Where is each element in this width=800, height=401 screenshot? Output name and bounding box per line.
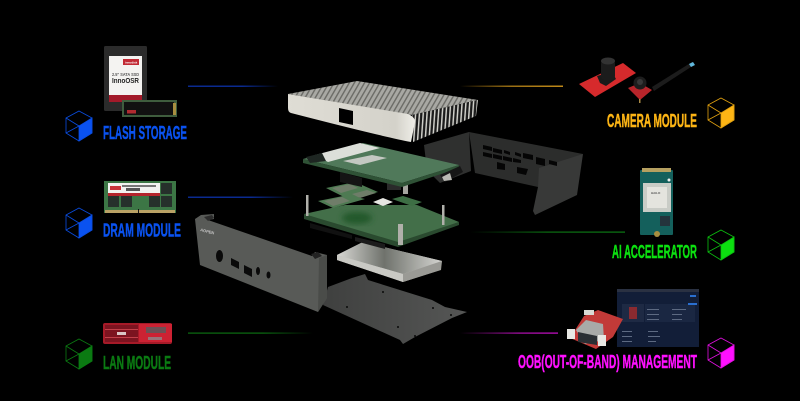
bottom plate xyxy=(323,274,467,344)
lower mainboard xyxy=(304,195,459,249)
label: LAN module: LAN MODULE xyxy=(103,353,171,373)
icon: SATA SSD and M.2 drive: 2.5" SATA SSD xyxy=(112,72,139,77)
front window xyxy=(339,108,353,125)
icon: OOB board with RJ45 port xyxy=(567,310,623,349)
icon: green cube xyxy=(708,230,734,260)
DRAM module group xyxy=(66,181,181,240)
connector line: OOB management xyxy=(460,332,558,334)
icon: blue cube xyxy=(66,111,92,141)
icon: yellow cube xyxy=(708,98,734,128)
icon: magenta cube xyxy=(708,338,734,368)
icon: SO-DIMM memory xyxy=(104,181,176,213)
fanless heatsink enclosure xyxy=(288,81,478,142)
rear bracket xyxy=(424,132,583,215)
connector line: flash storage xyxy=(188,86,278,87)
icon: SATA SSD and M.2 drive xyxy=(104,46,177,117)
icon: blue cube xyxy=(66,208,92,238)
label: AI accelerator: AI ACCELERATOR xyxy=(612,242,697,262)
icon: green cube xyxy=(66,339,92,369)
camera module group xyxy=(579,58,734,131)
flash storage group xyxy=(66,46,187,143)
AI accelerator group xyxy=(612,168,734,262)
label: DRAM module: DRAM MODULE xyxy=(103,220,181,240)
connector line: AI accelerator xyxy=(470,232,625,233)
connector line: DRAM module xyxy=(188,196,293,198)
dashboard screenshot xyxy=(617,289,699,347)
icon: camera boards and ribbon xyxy=(579,58,695,103)
label: camera module: CAMERA MODULE xyxy=(607,111,697,131)
standoffs xyxy=(306,195,444,245)
upper board xyxy=(303,143,463,194)
LAN module group xyxy=(66,323,172,373)
exploded product view xyxy=(195,81,583,344)
front panel xyxy=(195,214,327,312)
panel logo: AOPEN xyxy=(200,227,215,235)
OOB management group xyxy=(518,289,734,372)
label: flash storage: FLASH STORAGE xyxy=(103,123,187,143)
icon: SATA SSD and M.2 drive: innodisk xyxy=(125,60,138,64)
icon: SATA SSD and M.2 drive: InnoOSR xyxy=(112,78,139,85)
memory sticks xyxy=(318,182,378,208)
connector line: LAN module xyxy=(188,332,313,334)
icon: M.2 accelerator card: HAILO xyxy=(651,191,661,195)
SATA SSD drive xyxy=(337,242,442,282)
icon: red LAN card xyxy=(103,323,172,344)
connector line: camera module xyxy=(460,86,563,87)
